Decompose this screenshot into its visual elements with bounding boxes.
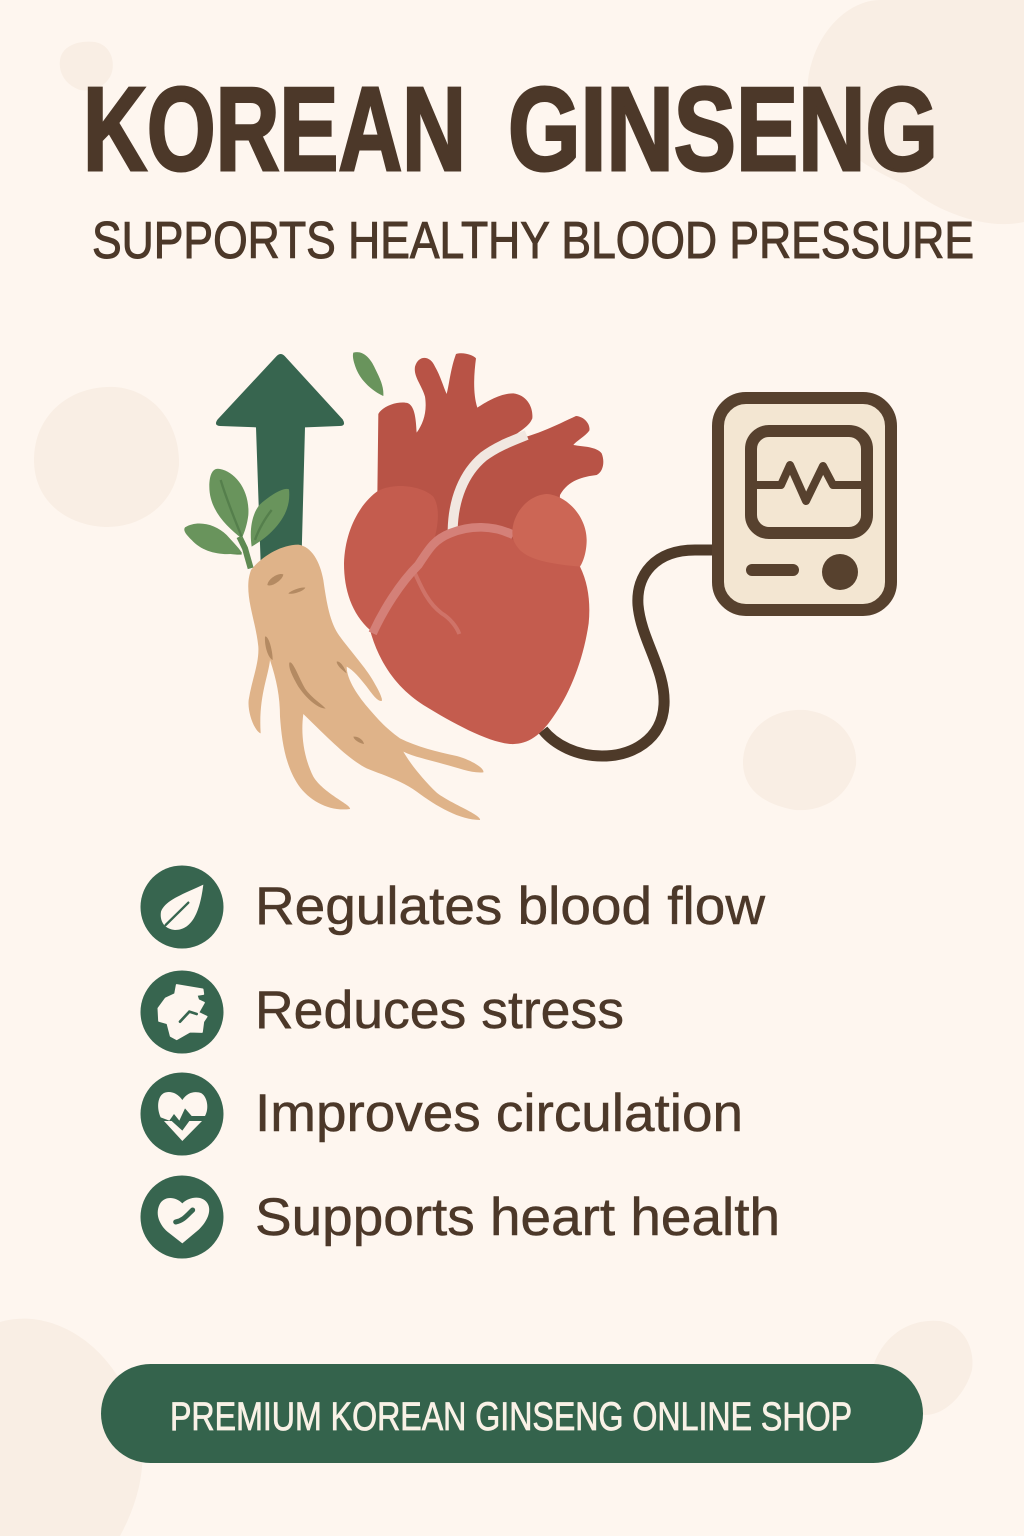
call to action pill: PREMIUM KOREAN GINSENG ONLINE SHOP <box>170 1395 852 1439</box>
white aorta vessel <box>453 435 527 530</box>
icon: monitor cable <box>543 550 714 756</box>
heart ventricle <box>344 486 589 744</box>
benefits list <box>140 866 780 1258</box>
icon: heart <box>344 353 603 744</box>
icon: stress blob <box>158 985 207 1039</box>
illustration artwork in zoomed coordinates <box>184 352 603 820</box>
call to action pill <box>101 1364 923 1463</box>
heart right atrium <box>512 494 587 567</box>
benefit: supports heart health: Supports heart health <box>255 1188 780 1247</box>
icon: ginseng leaves <box>184 469 289 568</box>
icon: blood pressure monitor <box>718 398 891 610</box>
illustration: ginseng, heart and monitor <box>184 352 891 820</box>
coronary artery <box>373 527 513 633</box>
icon: heart with pulse <box>158 1092 207 1141</box>
benefit: improves circulation: Improves circulation <box>255 1084 743 1143</box>
icon: ginseng root <box>248 545 483 820</box>
icon: heart with check <box>158 1198 209 1243</box>
title <box>83 63 938 196</box>
benefit: improves circulation <box>140 1072 743 1156</box>
benefit: regulates blood flow: Regulates blood flow <box>255 877 766 936</box>
icon: upward arrow <box>216 354 344 563</box>
benefit: reduces stress <box>140 970 624 1054</box>
title: KOREAN <box>83 63 466 196</box>
icon: leaf <box>161 885 203 930</box>
benefit: supports heart health <box>140 1176 780 1258</box>
heart upper vessels <box>377 353 603 547</box>
benefit: regulates blood flow <box>140 866 766 948</box>
benefit: reduces stress: Reduces stress <box>255 981 624 1040</box>
coronary branch <box>415 573 459 634</box>
icon: falling leaf <box>353 352 383 396</box>
